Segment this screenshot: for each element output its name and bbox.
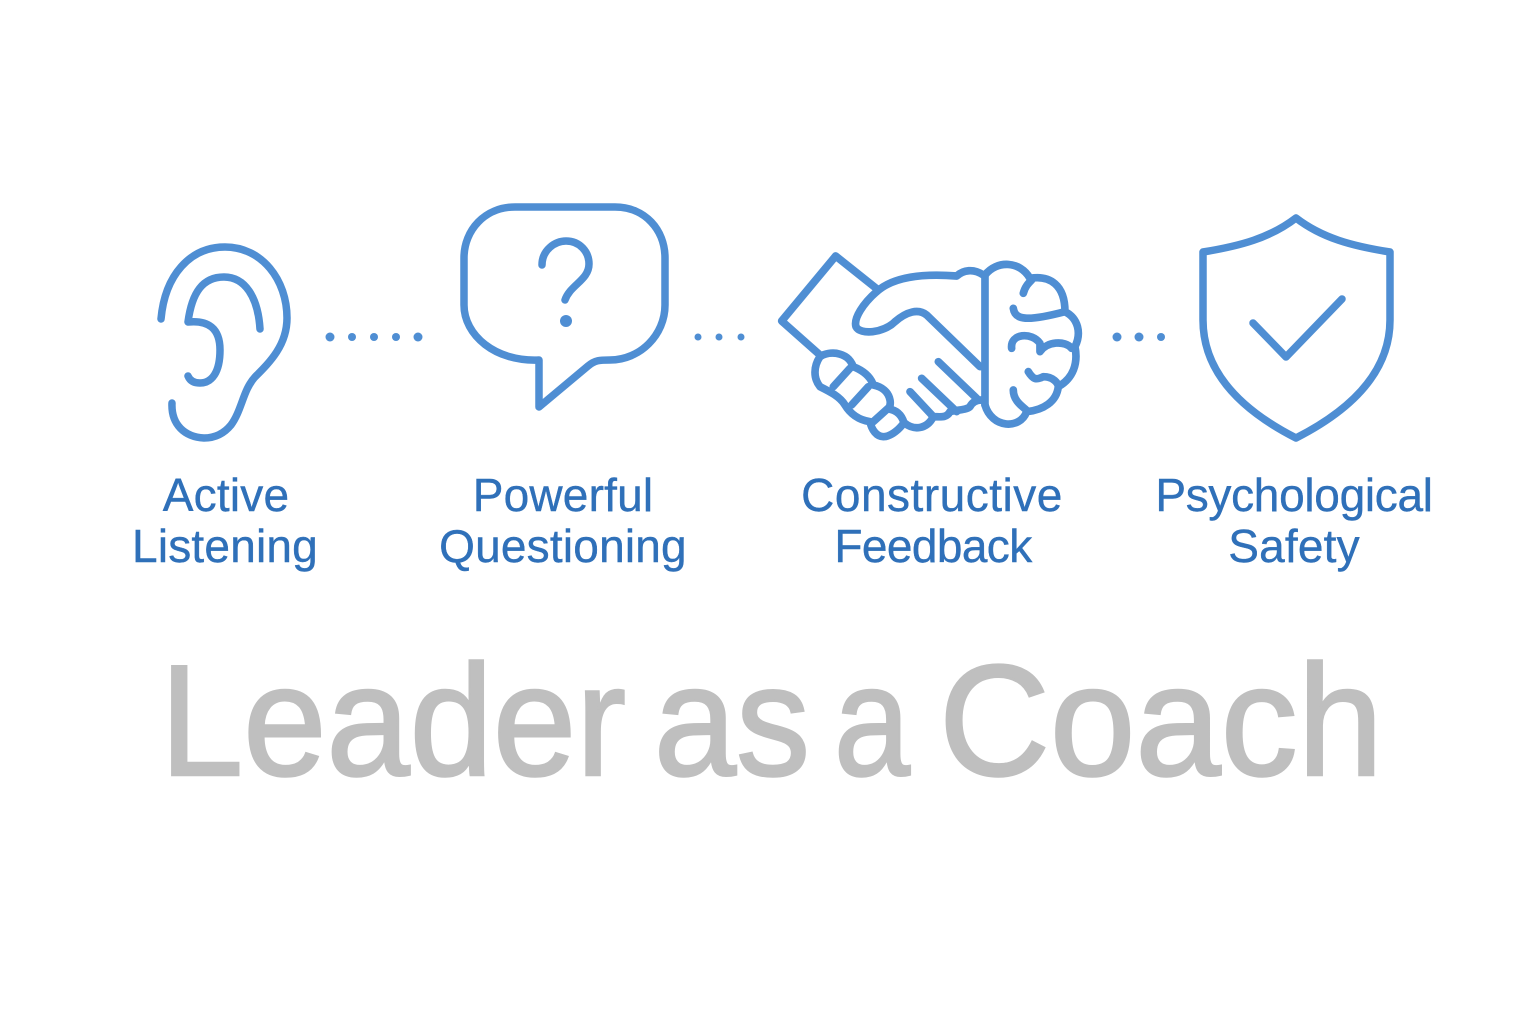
label: Constructive Feedback: Feedback xyxy=(834,520,1033,572)
label: Psychological Safety: Psychological xyxy=(1155,469,1433,521)
label: Powerful Questioning: Powerful xyxy=(473,469,653,521)
dotted connector 3 xyxy=(1112,332,1165,342)
label: Powerful Questioning: Questioning xyxy=(439,520,687,572)
label: Active Listening: Active xyxy=(163,469,289,521)
title: a xyxy=(834,633,910,809)
icon: ear xyxy=(161,247,287,438)
dotted connector 1 xyxy=(326,332,422,342)
label: Active Listening: Listening xyxy=(132,520,318,572)
icon: handshake and brain xyxy=(782,256,1078,437)
title: Coach xyxy=(939,633,1383,809)
icon: shield with check xyxy=(1203,218,1390,438)
label: Psychological Safety: Safety xyxy=(1228,520,1360,572)
title: as xyxy=(654,633,810,809)
title: Leader xyxy=(160,633,626,809)
title xyxy=(160,633,1383,809)
dotted connector 2 xyxy=(694,334,744,340)
label: Constructive Feedback: Constructive xyxy=(801,469,1063,521)
icon: speech bubble with question mark xyxy=(464,207,665,407)
